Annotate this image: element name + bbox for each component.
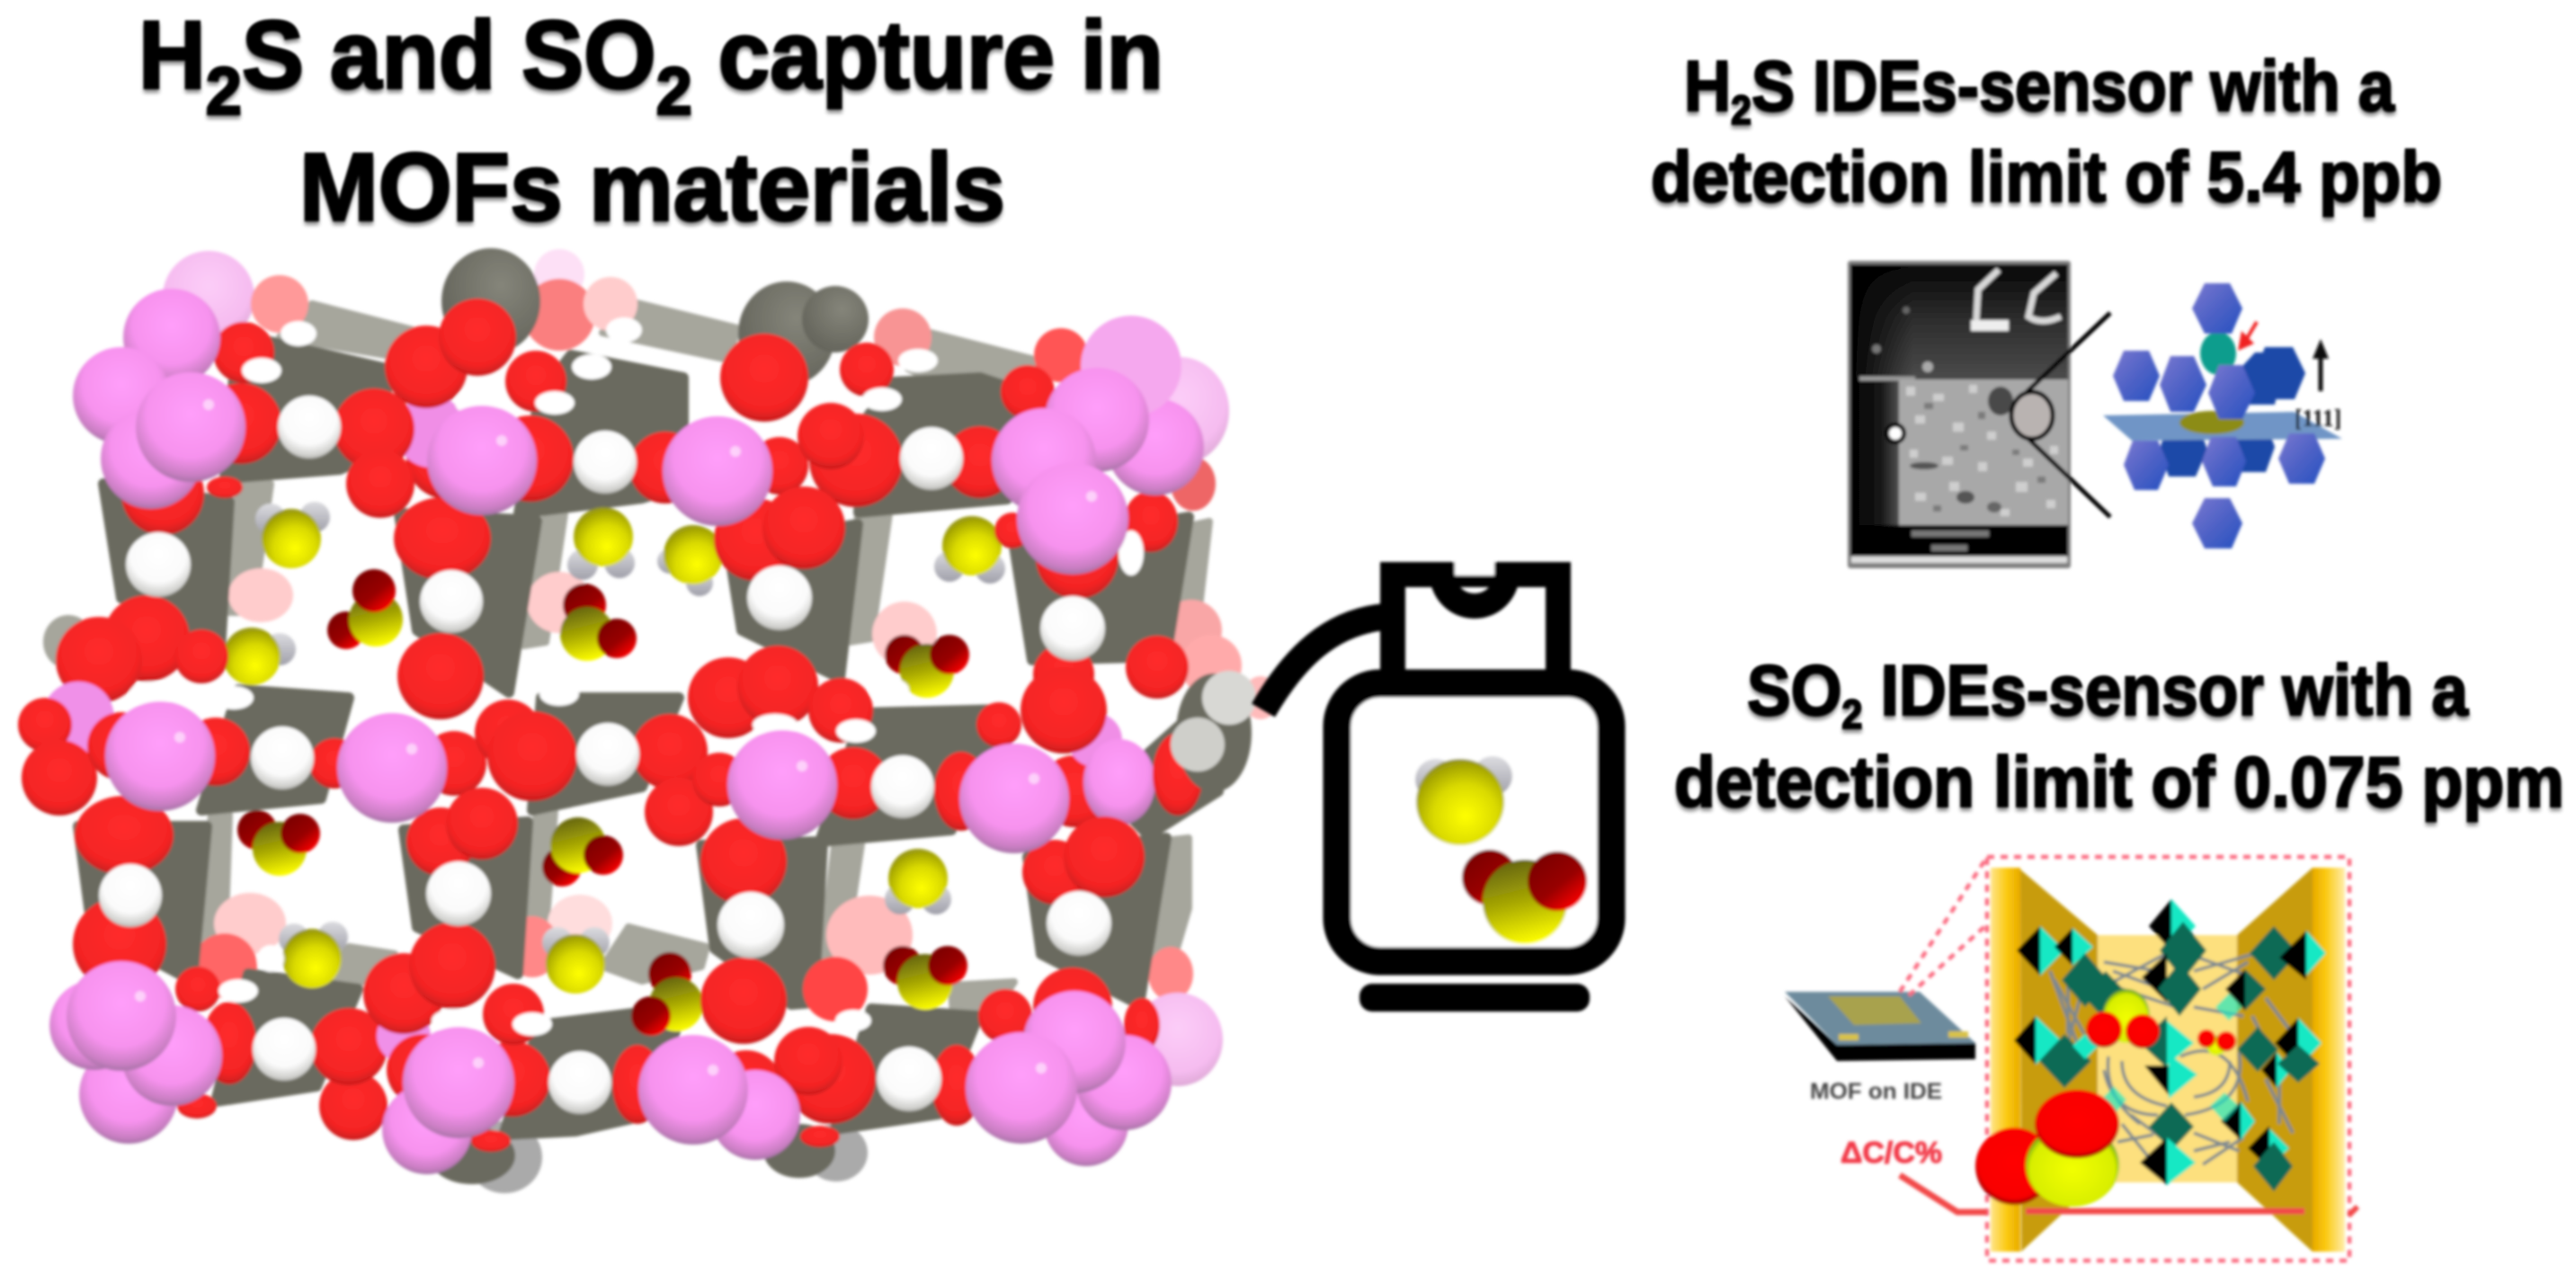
yellow core bbox=[2179, 411, 2244, 434]
electrode traces bbox=[1859, 270, 2061, 391]
title line 1: capture in bbox=[692, 0, 1163, 109]
cylinder body bbox=[1337, 683, 1611, 961]
panel: MOF on IDE SO2 sensor schematic bbox=[1785, 857, 2358, 1261]
linker atoms (white) bbox=[99, 317, 1144, 1114]
panel: SEM micrograph of the H2S sensor bbox=[1848, 261, 2110, 568]
SO2 molecules bbox=[237, 569, 969, 1036]
SO2 heading line 1: 2 bbox=[1842, 691, 1862, 737]
teal guest sphere bbox=[2200, 332, 2236, 375]
SO2 heading line 1: SO bbox=[1747, 650, 1851, 730]
MOF lattice with captured gas molecules bbox=[18, 248, 1279, 1193]
H2S heading line 1: 2 bbox=[1731, 87, 1752, 133]
bottom row metal nodes bbox=[382, 1027, 840, 1174]
bottom row oxygens bbox=[73, 897, 1160, 1140]
title line 1: H bbox=[138, 0, 209, 109]
cylinder base bbox=[1359, 984, 1590, 1012]
title bbox=[138, 0, 1163, 241]
red pointer arrow bbox=[2238, 322, 2257, 351]
title line 1: 2 bbox=[656, 53, 692, 129]
H2S heading line 1: H bbox=[1684, 46, 1736, 126]
black direction arrow bbox=[2313, 339, 2329, 391]
sensing film bbox=[1885, 379, 2068, 525]
H2S molecule in cylinder bbox=[1415, 756, 1512, 845]
title line 1: 2 bbox=[206, 53, 242, 129]
captured H2S and SO2 molecules bbox=[223, 502, 1005, 1036]
micrograph data bar bbox=[1850, 525, 2068, 563]
capacitance label: ΔC/C% bbox=[1841, 1136, 1942, 1169]
heading: SO2 sensor bbox=[1674, 650, 2564, 822]
cylinder neck bbox=[1393, 557, 1558, 687]
icon: gas cylinder connected to the MOF bbox=[1263, 557, 1611, 1012]
plane label: [111] bbox=[2295, 405, 2341, 432]
right edge wheels of the lattice bbox=[1171, 671, 1256, 787]
middle row oxygens bbox=[18, 595, 1203, 905]
frame struts bbox=[78, 248, 1218, 1179]
[111] plane bbox=[2103, 412, 2342, 441]
back hexagons bbox=[2160, 347, 2305, 477]
chip label: MOF on IDE bbox=[1810, 1079, 1942, 1104]
gold electrode plates and back wall bbox=[1991, 868, 2345, 1252]
heading: H2S sensor bbox=[1651, 46, 2442, 217]
MOF linkers bbox=[2050, 953, 2293, 1169]
micrograph dark background bbox=[1850, 264, 2068, 526]
micrograph frame bbox=[1848, 261, 2071, 568]
magnifier circle and zoom lines bbox=[2011, 313, 2110, 517]
bottom-left metal cluster bbox=[49, 961, 222, 1144]
IDE chip bbox=[1785, 992, 1975, 1061]
H2S heading line 2: detection limit of 5.4 ppb bbox=[1651, 137, 2442, 217]
top row oxygens bbox=[121, 299, 1178, 599]
SO2 molecules in pores bbox=[2086, 989, 2236, 1056]
metal nodes (pink) bbox=[49, 289, 1204, 1174]
large SO2 molecule bbox=[1975, 1090, 2119, 1207]
title line 2: MOFs materials bbox=[299, 132, 1005, 241]
SO2 molecule in cylinder bbox=[1462, 850, 1587, 944]
front hexagons bbox=[2113, 283, 2325, 548]
back layer: faded struts and atoms bbox=[43, 249, 1279, 1193]
H2S heading line 1: S IDEs-sensor with a bbox=[1752, 46, 2394, 126]
top-left metal cluster bbox=[73, 289, 245, 509]
middle row metal nodes bbox=[105, 701, 1069, 853]
top-right metal cluster bbox=[992, 316, 1204, 575]
panel: crystal structure with [111] plane bbox=[2103, 283, 2342, 548]
bottom-right metal cluster bbox=[966, 991, 1172, 1166]
oxygen atoms (red) bbox=[18, 299, 1203, 1140]
top row metal nodes bbox=[427, 406, 772, 526]
MOF polyhedra bbox=[2014, 899, 2326, 1191]
SO2 heading line 1: IDEs-sensor with a bbox=[1862, 650, 2468, 730]
title line 1: S and SO bbox=[242, 0, 656, 109]
zoom-in dashed box bbox=[1900, 857, 2349, 1261]
capacitance signal line bbox=[1900, 1175, 2358, 1216]
tube bbox=[1263, 617, 1385, 710]
H2S molecules bbox=[223, 502, 1005, 994]
